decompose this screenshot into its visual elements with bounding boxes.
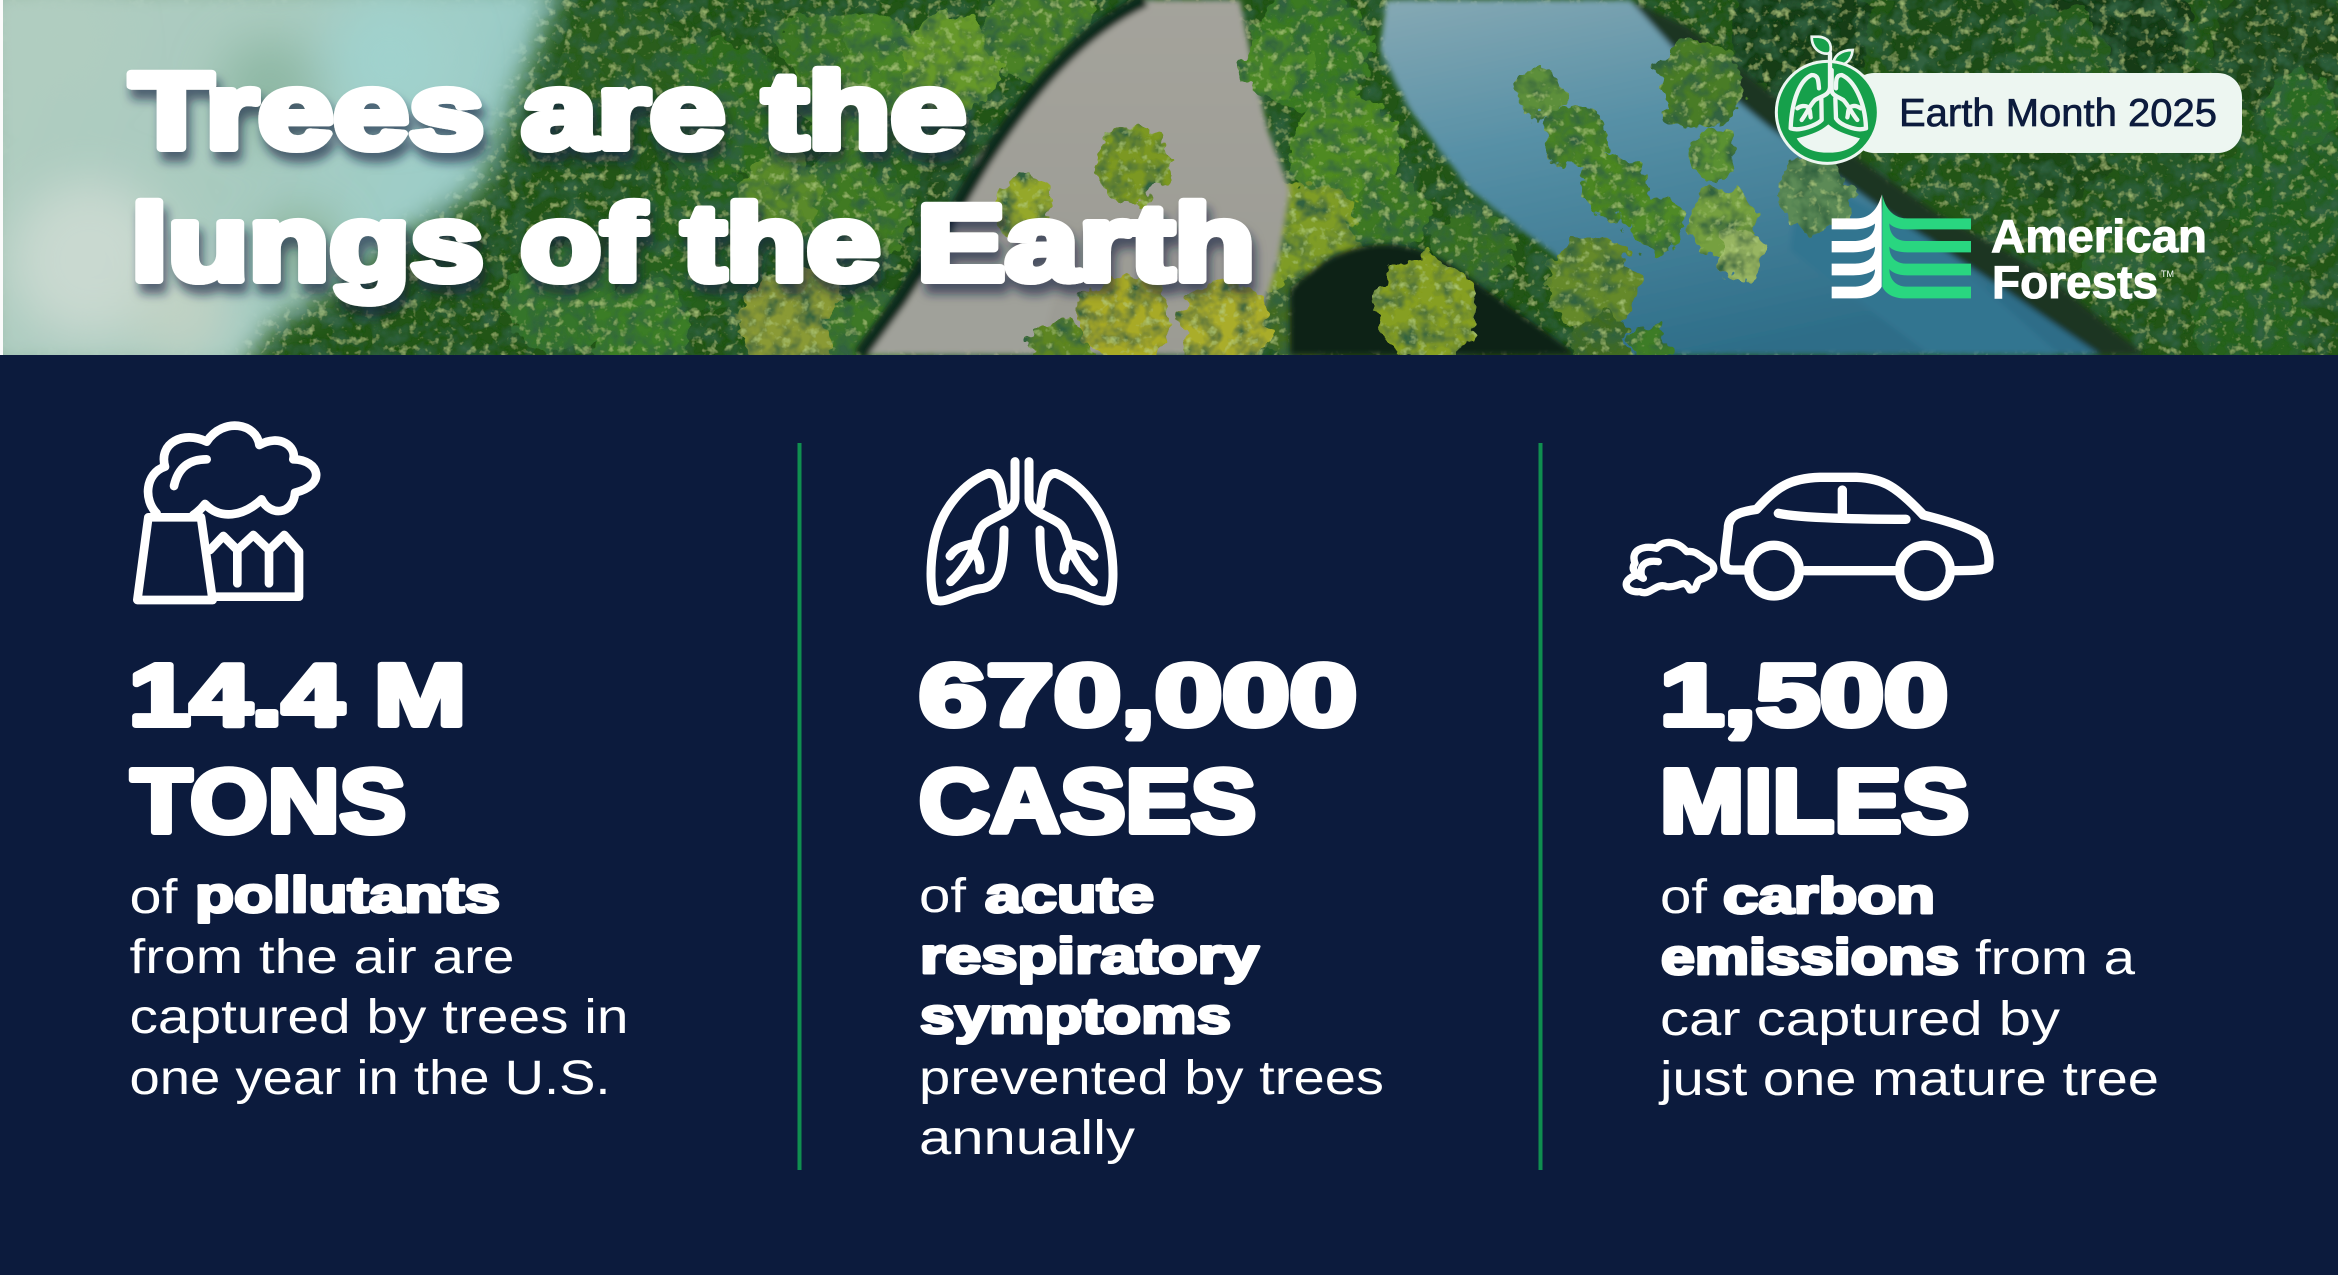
text: pollutants description: one year in the U.S. <box>130 1052 610 1105</box>
icon: factory with smoke cloud <box>137 426 316 600</box>
text: respiratory description <box>919 867 1384 1165</box>
logo wordmark: TM <box>2161 269 2174 279</box>
figure: 670,000 cases: CASES <box>919 752 1256 852</box>
text: carbon description: car captured by <box>1660 993 2060 1046</box>
panel: carbon emissions <box>1626 477 2159 1106</box>
text: respiratory description: respiratory <box>920 928 1259 984</box>
header photo: aerial forest and lake <box>0 0 2338 380</box>
figure: 1,500 miles <box>1660 647 1969 852</box>
island trees <box>992 31 1853 373</box>
logo wordmark: Forests <box>1992 256 2158 308</box>
figure: 670,000 cases <box>919 647 1357 852</box>
text: carbon description: carbon <box>1723 868 1935 924</box>
text: respiratory description: annually <box>919 1112 1135 1165</box>
text: pollutants description: from the air are <box>130 931 514 984</box>
text: respiratory description: prevented by trees <box>919 1052 1384 1105</box>
icon: tree mark <box>1832 194 1971 298</box>
text: pollutants description: captured by trees in <box>130 991 628 1044</box>
panel: respiratory cases <box>919 462 1384 1165</box>
title <box>130 50 1255 303</box>
figure: 14.4 M tons <box>129 647 466 852</box>
figure: 1,500 miles: 1,500 <box>1660 647 1948 744</box>
figure: 14.4 M tons: 14.4 M <box>129 647 466 744</box>
blue lake <box>1290 0 2145 355</box>
title: Trees are the <box>130 50 966 171</box>
icon: car with exhaust <box>1626 477 1989 596</box>
text: carbon description: from a <box>1975 932 2135 985</box>
Earth Month badge <box>1776 37 2242 163</box>
text: pollutants description <box>130 867 628 1105</box>
text: pollutants description: of <box>130 871 178 924</box>
text: respiratory description: of <box>919 870 967 923</box>
text: respiratory description: acute <box>985 867 1154 923</box>
forest canopy base <box>140 0 2338 355</box>
text: carbon description: emissions <box>1661 929 1959 985</box>
text: respiratory description: symptoms <box>920 988 1231 1044</box>
column dividers <box>798 443 1542 1170</box>
figure: 14.4 M tons: TONS <box>131 752 406 852</box>
icon: lungs and sprout emblem <box>1776 37 1878 163</box>
figure: 1,500 miles: MILES <box>1660 752 1969 852</box>
text: carbon description <box>1658 868 2159 1106</box>
grey river <box>860 0 1290 355</box>
fog on the left <box>0 0 565 375</box>
figure: 670,000 cases: 670,000 <box>919 647 1357 744</box>
icon: lungs <box>931 462 1113 601</box>
title: lungs of the Earth <box>131 182 1255 303</box>
logo wordmark <box>1991 210 2207 308</box>
logo wordmark: American <box>1991 210 2207 262</box>
badge pill <box>1850 73 2242 153</box>
panel: pollutants <box>129 426 628 1105</box>
text: carbon description: just one mature tree <box>1658 1053 2159 1106</box>
text: carbon description: of <box>1660 871 1708 924</box>
American Forests logo <box>1832 194 2207 308</box>
text: pollutants description: pollutants <box>195 867 500 923</box>
badge label: Earth Month 2025 <box>1899 92 2217 135</box>
